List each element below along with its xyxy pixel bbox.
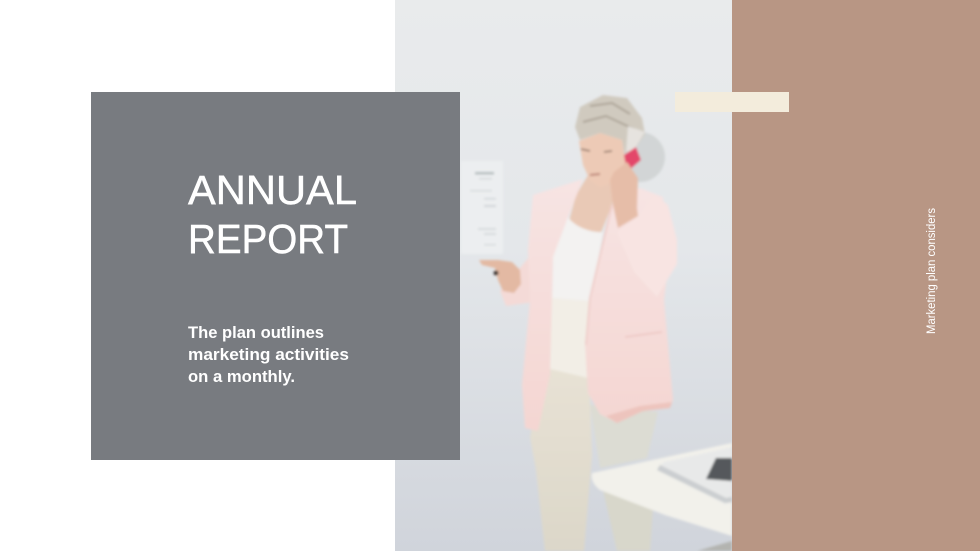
title: ANNUAL (188, 167, 357, 213)
blazer left front (522, 179, 583, 431)
lapel shadow (587, 207, 612, 328)
description (188, 324, 349, 386)
blazer hem shadow (606, 402, 672, 423)
panel: taupe side band (732, 0, 980, 551)
title: REPORT (188, 216, 348, 262)
trousers (530, 297, 658, 551)
wall clock (632, 132, 666, 182)
blazer right sleeve (664, 203, 678, 279)
description: marketing activities (188, 346, 349, 364)
table (592, 443, 732, 536)
white tank top (552, 217, 603, 301)
description: The plan outlines (188, 324, 324, 342)
pocket (625, 332, 662, 337)
pink phone (624, 147, 641, 172)
neck and chest (569, 176, 614, 233)
laptop (664, 449, 731, 496)
vertical caption: Marketing plan considers (926, 208, 938, 334)
floor object (697, 541, 732, 551)
photo: woman on the phone in an office (395, 0, 732, 551)
description: on a monthly. (188, 368, 295, 386)
blazer left sleeve (500, 260, 530, 306)
blazer right front (585, 188, 673, 423)
hair (575, 95, 645, 153)
hand holding phone (610, 162, 638, 228)
tablet (706, 458, 732, 481)
wall poster (463, 172, 500, 252)
panel: grey title card (91, 92, 460, 460)
accent: cream bar (675, 92, 789, 112)
title (188, 167, 357, 262)
face (578, 132, 626, 179)
pointing hand (479, 260, 521, 293)
dark ring on hand (494, 270, 498, 276)
